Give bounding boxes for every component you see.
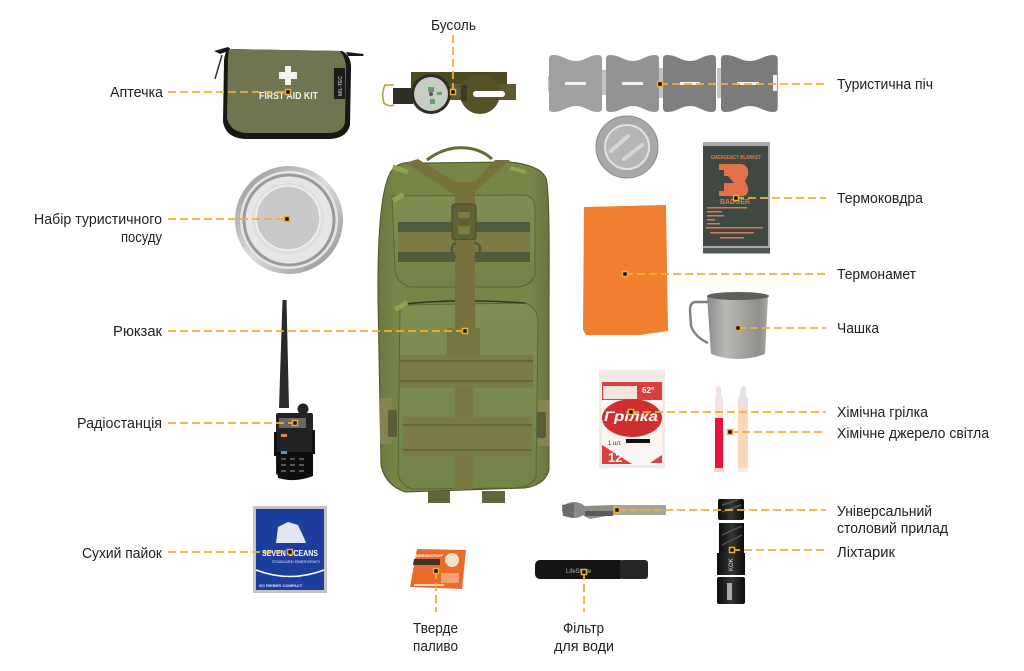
label: radio: Радіостанція [77, 415, 162, 432]
icon: emergency blanket: EMERGENCY BLANKET [711, 155, 762, 161]
icon: steel plate [235, 166, 343, 274]
icon: solid fuel box [410, 549, 466, 589]
icon: orange poncho [583, 205, 668, 335]
icon: water filter: LifeStraw [566, 569, 592, 575]
label: solid fuel [413, 620, 458, 655]
icon: chemical warmer [599, 370, 665, 468]
label: water filter: для води [554, 638, 614, 655]
icon: flashlight: KOK [729, 558, 735, 571]
icon: ration pack: STANDARD EMERGENCY [272, 559, 321, 564]
icon: ration pack: SEVEN OCEANS [262, 548, 318, 558]
label: cookware set: Набір туристичного [34, 211, 162, 228]
label: universal cutlery: Універсальний [837, 503, 932, 520]
label: backpack: Рюкзак [113, 323, 162, 340]
label: thermal blanket: Термоковдра [837, 190, 924, 207]
label: universal cutlery [837, 503, 948, 537]
icon: ration pack: GC RIEBER COMPACT [259, 583, 303, 588]
icon: folding spork [562, 502, 666, 519]
icon: glow sticks [714, 386, 748, 472]
icon: first aid kit: FIRST AID KIT [259, 90, 318, 102]
icon: chemical warmer: 12 [608, 450, 622, 465]
label: cup: Чашка [837, 320, 880, 337]
icon: chemical warmer: 62° [642, 386, 654, 395]
label: dry ration: Сухий пайок [82, 545, 162, 562]
icon: radio [274, 300, 315, 480]
icon: solid fuel box: BRENNSTOFF [416, 553, 444, 558]
icon: folding stove [548, 55, 778, 112]
label: solid fuel: паливо [413, 638, 458, 655]
label: compass: Бусоль [431, 17, 476, 34]
label: chemical warmer: Хімічна грілка [837, 404, 929, 421]
markers [284, 82, 740, 574]
label: water filter [554, 620, 614, 655]
icon: first aid kit: MIL-TEC [338, 76, 344, 96]
icon: emergency blanket [703, 142, 770, 254]
label: cookware set [34, 211, 162, 246]
icon: lensatic compass [383, 72, 516, 114]
label: cookware set: посуду [121, 229, 162, 246]
label: chemical light: Хімічне джерело світла [837, 425, 990, 442]
label: solid fuel: Тверде [413, 620, 458, 637]
label: stove: Туристична піч [837, 76, 933, 93]
label: first aid kit: Аптечка [110, 84, 164, 101]
icon: first aid kit [214, 47, 364, 139]
icon: water filter [535, 560, 648, 579]
label: flashlight: Ліхтарик [837, 544, 895, 561]
icon: chemical warmer: Грілка [604, 408, 658, 424]
callout lines [168, 35, 826, 612]
backpack [378, 148, 549, 503]
label: thermal poncho: Термонамет [837, 266, 916, 283]
icon: chemical warmer: 1 шт. [608, 441, 622, 447]
label: water filter: Фільтр [563, 620, 604, 637]
icon: emergency blanket: BADGER [720, 199, 750, 206]
icon: steel mug [690, 292, 769, 359]
icon: round stove plate [596, 116, 658, 178]
label: universal cutlery: столовий прилад [837, 520, 948, 537]
icon: ration pack [253, 506, 327, 593]
icon: flashlight [717, 499, 745, 604]
